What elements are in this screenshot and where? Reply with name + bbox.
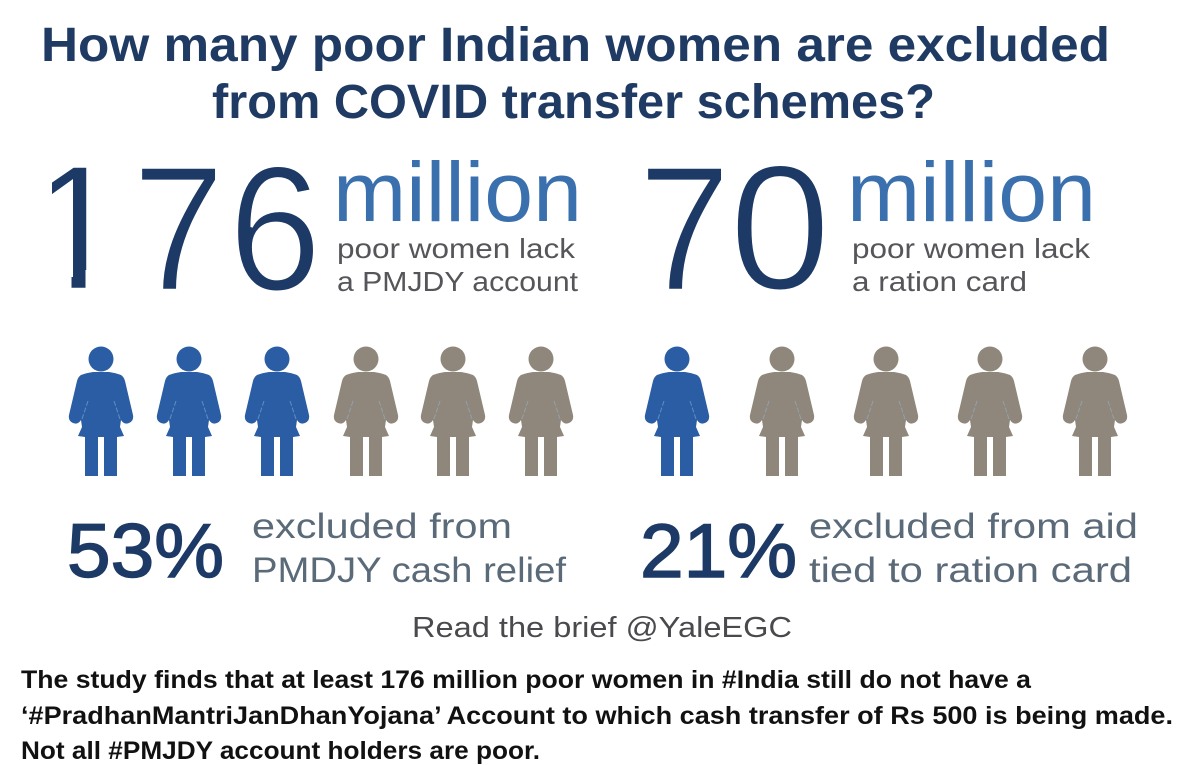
caption: PMDJY cash relief: PMDJY cash relief xyxy=(252,551,566,590)
caption: aid tied to ration card xyxy=(809,507,1138,590)
number: 176: 7 xyxy=(132,129,224,328)
stat: 70 million xyxy=(638,128,1096,328)
caption: lack ration card xyxy=(852,233,1091,297)
caption: aid tied to ration card: tied to ration card xyxy=(809,551,1132,590)
word: million: million xyxy=(333,145,582,239)
description paragraph: ‘#PradhanMantriJanDhanYojana’ Account to which cash transfer of Rs 500 is being made. xyxy=(21,702,1173,730)
stat: 53% xyxy=(67,507,566,594)
number: 176 xyxy=(5,128,322,328)
caption: PMDJY cash relief: excluded from xyxy=(252,507,512,546)
caption: PMDJY cash relief xyxy=(252,507,566,590)
number: 176: 1 xyxy=(27,128,126,327)
pictogram: 3 of 6 women excluded from PMJDY xyxy=(69,346,573,476)
number: 21%: 21% xyxy=(640,509,797,594)
stat: 21% xyxy=(640,507,1138,594)
number: 70: 7 xyxy=(638,129,730,328)
caption: lack PMJDY account xyxy=(337,233,578,297)
stat: 176 million xyxy=(5,128,582,328)
caption: lack ration card: a ration card xyxy=(852,266,1027,297)
description paragraph: Not all #PMJDY account holders are poor. xyxy=(21,737,540,765)
title: How many poor Indian women are excluded xyxy=(41,19,1110,72)
number: 70 xyxy=(638,128,830,328)
caption: lack ration card: poor women lack xyxy=(852,233,1091,264)
call to action: Read the brief @YaleEGC xyxy=(412,612,792,644)
description paragraph: The study finds that at least 176 million poor women in #India still do not have a xyxy=(21,666,1032,694)
title: from COVID transfer schemes? xyxy=(212,76,935,129)
caption: aid tied to ration card: excluded from aid xyxy=(809,507,1138,546)
number: 176: 6 xyxy=(228,129,322,328)
word: million: million xyxy=(847,145,1096,239)
caption: lack PMJDY account: poor women lack xyxy=(337,233,576,264)
caption: lack PMJDY account: a PMJDY account xyxy=(337,266,578,297)
description paragraph xyxy=(21,666,1173,765)
title xyxy=(41,19,1110,129)
number: 53%: 53% xyxy=(67,509,224,594)
number: 70: 0 xyxy=(730,128,830,327)
pictogram: 1 of 5 women excluded from ration aid xyxy=(645,346,1127,476)
